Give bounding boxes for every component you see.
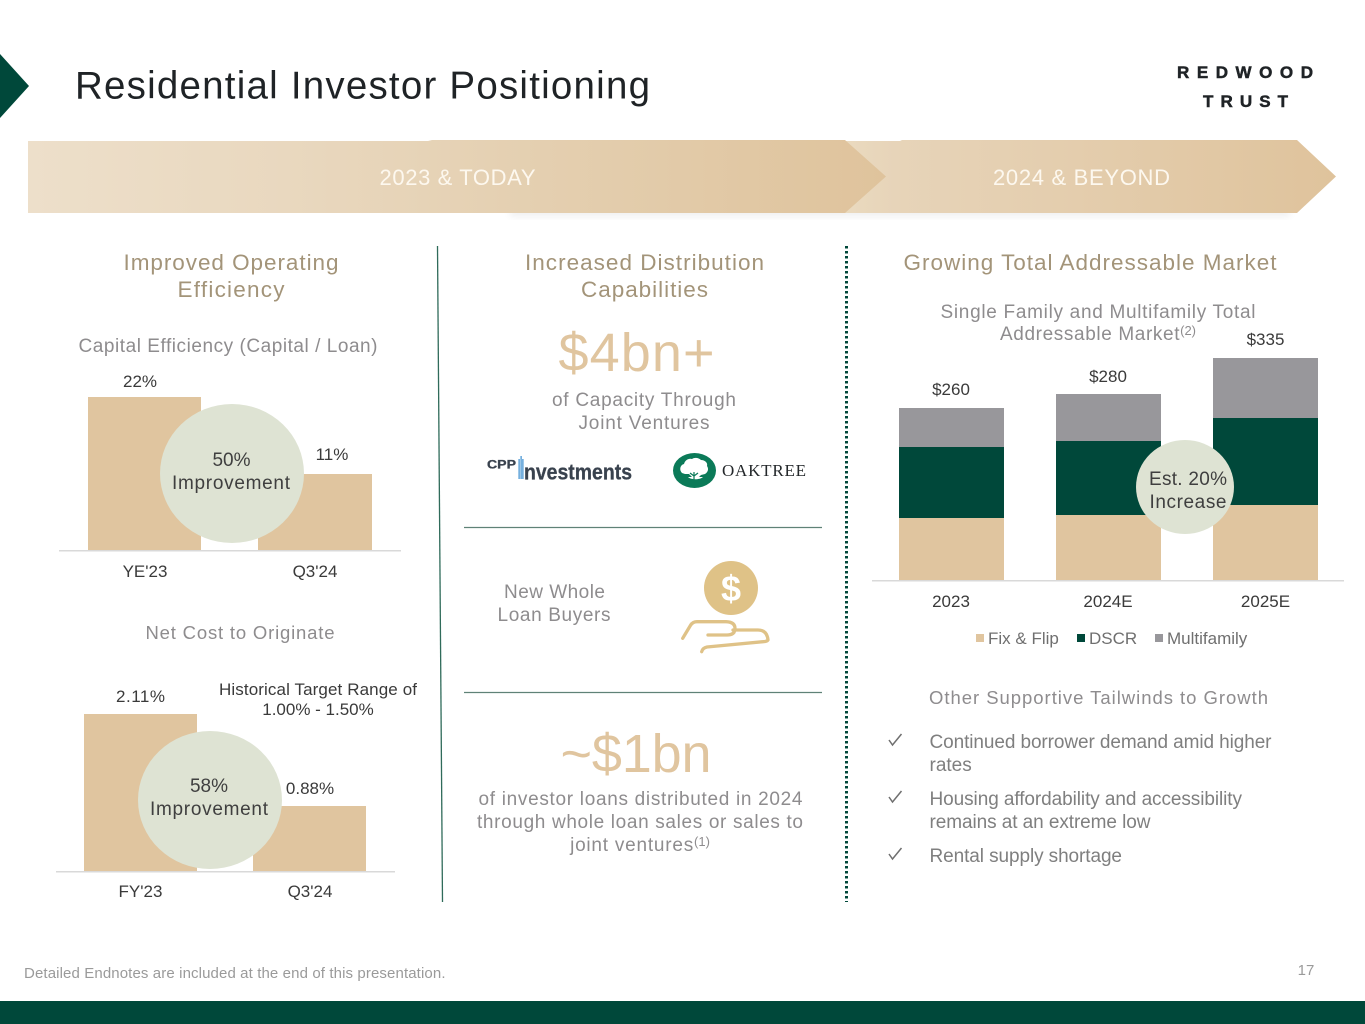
- note: historical target range: 1.00% - 1.50%: [262, 700, 374, 719]
- divider: center and right columns: [845, 246, 848, 902]
- bar chart: capital efficiency: [59, 372, 401, 581]
- heading: increased distribution capabilities: Capabilities: [581, 277, 708, 302]
- callout: est. 20% increase: Increase: [1150, 492, 1226, 513]
- footer bar: [0, 1001, 1365, 1024]
- note: historical target range: Historical Target Range of: [219, 680, 417, 699]
- divider: left and center columns: [438, 246, 442, 902]
- page number: 17: [1298, 962, 1314, 979]
- bar: 2023: $260: [932, 380, 970, 399]
- legend: Fix & Flip: [988, 629, 1059, 648]
- bar chart: capital efficiency: 11%: [316, 445, 348, 464]
- legend: [976, 629, 1248, 648]
- subheading: single family and multifamily TAM: Addressable Market: [1000, 324, 1180, 345]
- logo: CPP Investments: [487, 456, 632, 484]
- bar chart: capital efficiency: Q3'24: [293, 562, 337, 581]
- list: tailwinds: [889, 732, 1272, 867]
- heading: improved operating efficiency: Improved Operating: [124, 250, 338, 275]
- text: investor loans distributed: joint ventures: [570, 835, 694, 856]
- subheading: other supportive tailwinds: Other Supportive Tailwinds to Growth: [929, 687, 1268, 708]
- text: new whole loan buyers: [498, 582, 610, 626]
- subheading: single family and multifamily TAM: (2): [1180, 323, 1196, 338]
- icon: check: [889, 734, 902, 745]
- heading: increased distribution capabilities: [525, 250, 764, 302]
- panel: operating efficiency: [56, 250, 417, 901]
- bar: 2025E: $335: [1247, 330, 1284, 349]
- timeline banner: [28, 140, 1336, 216]
- callout: est. 20% increase: Est. 20%: [1149, 469, 1227, 490]
- arrow: 2023 and today: 2023 & TODAY: [380, 165, 536, 190]
- callout: 50% improvement: 50%: [212, 450, 251, 471]
- divider: [464, 526, 822, 528]
- list: tailwinds: rates: [930, 755, 972, 776]
- arrow: 2023 and today: [28, 140, 886, 213]
- bar: 2025E: [1213, 330, 1318, 611]
- heading: growing total addressable market: Growing Total Addressable Market: [904, 250, 1277, 275]
- icon: check: [889, 791, 902, 802]
- icon: hand holding dollar coin: $: [721, 568, 741, 609]
- callout: 50% improvement: Improvement: [172, 473, 291, 494]
- text: investor loans distributed: of investor loans distributed in 2024: [478, 789, 803, 810]
- bar: 2024E: 2024E: [1083, 592, 1133, 611]
- header marker arrow: [0, 54, 29, 118]
- logo: Redwood Trust: [1177, 63, 1313, 111]
- bar chart: net cost to originate: FY'23: [119, 882, 162, 901]
- bar chart: capital efficiency: YE'23: [123, 562, 167, 581]
- callout: est. 20% increase: [1136, 440, 1234, 534]
- bar: 2023: [899, 380, 1004, 611]
- text: capacity through joint ventures: of Capacity Through: [552, 390, 736, 411]
- logo: Oaktree: OAKTREE: [722, 461, 806, 480]
- arrow: 2024 and beyond: [845, 140, 1336, 213]
- legend: DSCR: [1089, 629, 1137, 648]
- list: tailwinds: remains at an extreme low: [930, 812, 1151, 833]
- bar chart: net cost to originate: Q3'24: [288, 882, 332, 901]
- text: capacity through joint ventures: Joint Ventures: [578, 413, 710, 434]
- bar: 2023: 2023: [932, 592, 970, 611]
- heading: improved operating efficiency: Efficiency: [178, 277, 285, 302]
- subheading: capital efficiency: Capital Efficiency (Capital / Loan): [78, 336, 378, 357]
- logo: CPP Investments: CPP: [487, 460, 516, 472]
- title: Residential Investor Positioning: [75, 64, 650, 108]
- bar: 2024E: [1056, 367, 1161, 611]
- text: capacity through joint ventures: [552, 390, 736, 434]
- icon: hand holding dollar coin: [683, 561, 768, 652]
- text: investor loans distributed: through whole loan sales or sales to: [477, 812, 803, 833]
- text: new whole loan buyers: Loan Buyers: [498, 605, 610, 626]
- subheading: single family and multifamily TAM: Single Family and Multifamily Total: [940, 302, 1256, 323]
- callout: 58% improvement: [138, 731, 282, 869]
- panel: total addressable market: [872, 250, 1344, 867]
- bar: 2024E: $280: [1089, 367, 1127, 386]
- list: tailwinds: Housing affordability and accessibility: [930, 789, 1242, 810]
- arrow: 2024 and beyond: 2024 & BEYOND: [993, 165, 1170, 190]
- subheading: net cost to originate: Net Cost to Originate: [146, 622, 334, 643]
- bar: 2025E: 2025E: [1241, 592, 1290, 611]
- bar chart: net cost to originate: 0.88%: [286, 779, 334, 798]
- heading: increased distribution capabilities: Increased Distribution: [525, 250, 764, 275]
- stat: ~$1bn: ~$1bn: [560, 724, 712, 784]
- footnote: Detailed Endnotes are included at the end of this presentation.: [24, 965, 446, 982]
- stat: $4bn+: $4bn+: [558, 323, 714, 383]
- callout: 58% improvement: 58%: [190, 776, 228, 797]
- logo: Redwood Trust: TRUST: [1203, 92, 1289, 111]
- icon: check: [889, 848, 902, 859]
- bar chart: net cost to originate: 2.11%: [116, 687, 165, 706]
- bar chart: net cost to originate: [56, 687, 395, 901]
- bar chart: capital efficiency: 22%: [123, 372, 157, 391]
- text: investor loans distributed: [477, 789, 803, 856]
- list: tailwinds: Rental supply shortage: [930, 846, 1122, 867]
- note: historical target range: [219, 680, 417, 719]
- callout: 50% improvement: [160, 404, 304, 543]
- logo: CPP Investments: nvestments: [524, 460, 632, 484]
- heading: improved operating efficiency: [124, 250, 338, 302]
- logo: Redwood Trust: REDWOOD: [1177, 63, 1313, 82]
- legend: Multifamily: [1167, 629, 1248, 648]
- list: tailwinds: Continued borrower demand amid higher: [930, 732, 1272, 753]
- panel: distribution capabilities: [464, 250, 822, 856]
- text: investor loans distributed: (1): [694, 834, 710, 849]
- text: new whole loan buyers: New Whole: [504, 582, 605, 603]
- callout: 58% improvement: Improvement: [150, 799, 269, 820]
- divider: [464, 692, 822, 694]
- subheading: single family and multifamily TAM: [940, 302, 1256, 345]
- stacked bar chart: TAM: [872, 330, 1344, 611]
- logo: Oaktree: [673, 453, 806, 488]
